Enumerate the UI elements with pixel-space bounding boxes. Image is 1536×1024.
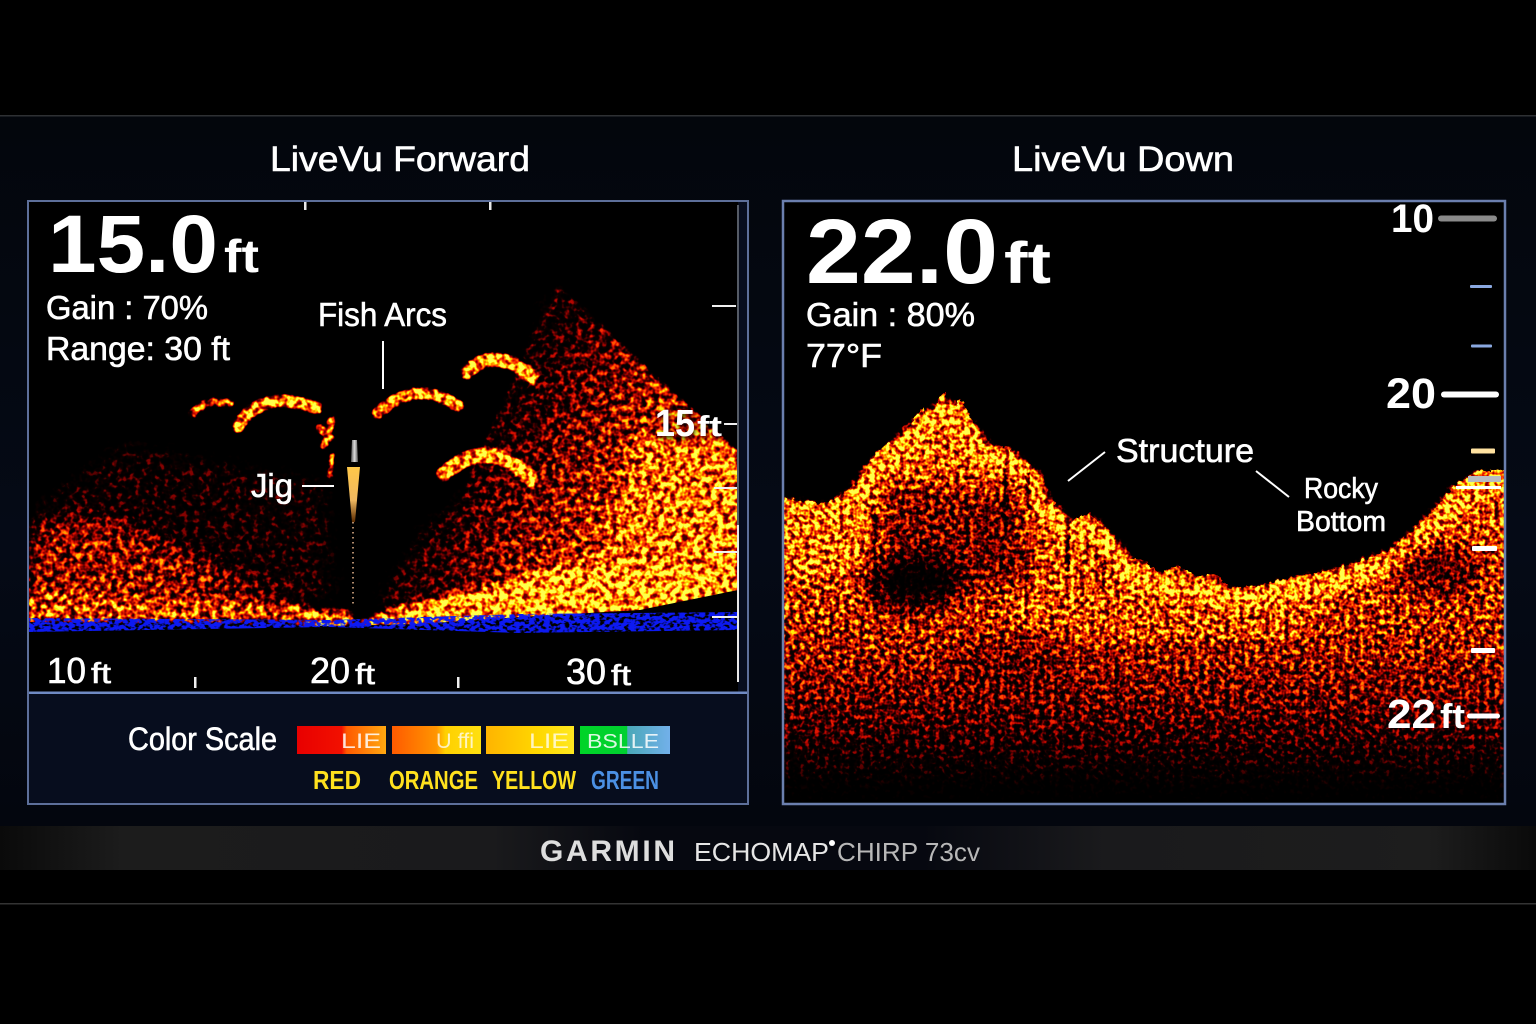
- readout: down depth: 22.0: [806, 201, 998, 303]
- readout: forward depth: 15.0: [48, 199, 218, 290]
- top rule: [0, 115, 1536, 116]
- depth label: 22 ft: ft: [1440, 698, 1465, 736]
- heading: LiveVu Down: LiveVu Down: [1012, 140, 1234, 179]
- depth label: 15 ft: [655, 403, 722, 445]
- range label: 20 ft: 20: [310, 650, 350, 691]
- device band background: [0, 116, 1536, 826]
- panel: LiveVu Down: [775, 197, 1515, 815]
- footer strip: [0, 826, 1536, 870]
- callout: structure: [1068, 432, 1254, 481]
- callout: structure: Structure: [1116, 432, 1254, 469]
- color scale legend: [128, 721, 670, 795]
- jig body: [347, 467, 360, 522]
- readout: gain: Gain : 70%: [46, 289, 208, 326]
- swatch: red: LIE: [341, 730, 381, 753]
- legend label: green: GREEN: [591, 765, 659, 795]
- depth label: 20: 20: [1386, 370, 1436, 418]
- swatch: orange: U ffi: [436, 730, 474, 753]
- panel border: [28, 201, 748, 804]
- dark shadows: [865, 480, 1488, 691]
- readout: down depth: ft: [1004, 231, 1051, 296]
- depth label: 22 ft: 22: [1387, 691, 1436, 737]
- infographic canvas: [0, 115, 1536, 904]
- bottom mass: [775, 393, 1515, 815]
- jig head: [351, 440, 358, 462]
- right depth scale: [712, 205, 739, 682]
- legend title: Color Scale: [128, 721, 277, 757]
- top range ticks: [304, 202, 492, 210]
- panel border: [783, 201, 1505, 804]
- divider above color scale: [28, 692, 748, 694]
- legend label: yellow: YELLOW: [492, 765, 576, 795]
- swatch: orange: [392, 726, 481, 754]
- swatch: green: [580, 726, 670, 754]
- callout: jig: Jig: [251, 467, 293, 504]
- range label: 30 ft: 30: [566, 651, 606, 692]
- product: ECHOMAP: ECHOMAP: [694, 837, 829, 867]
- swatch: yellow: [486, 726, 574, 754]
- heading: LiveVu Forward: LiveVu Forward: [270, 140, 530, 179]
- range label: 20 ft: ft: [355, 659, 375, 691]
- product: CHIRP 73cv: CHIRP 73cv: [837, 837, 980, 867]
- callout: fish arcs: Fish Arcs: [318, 296, 447, 333]
- swatch: red: [297, 726, 386, 754]
- callout: rocky bottom: Bottom: [1296, 506, 1386, 538]
- legend label: orange: ORANGE: [389, 765, 478, 795]
- bottom rule: [0, 903, 1536, 904]
- blue water-floor band: [28, 612, 738, 633]
- depth label: 15 ft: 15: [655, 403, 695, 445]
- sonar viewport: [783, 201, 1505, 804]
- range label: 20 ft: [310, 650, 375, 691]
- depth label: 10: 10: [1391, 197, 1434, 241]
- swatch: yellow: LIE: [529, 730, 569, 753]
- depth label: 15 ft: ft: [697, 411, 722, 443]
- range label: 30 ft: [566, 651, 631, 692]
- bottom range ticks: [194, 677, 460, 688]
- range label: 10 ft: [47, 650, 111, 691]
- range label: 10 ft: 10: [47, 650, 86, 691]
- depth label: 22 ft: [1387, 691, 1465, 737]
- readout: forward depth: ft: [224, 230, 259, 282]
- range label: 10 ft: ft: [91, 658, 111, 690]
- depth scale: [1386, 197, 1501, 737]
- callout: fish arcs: [318, 296, 447, 389]
- brand: GARMIN: GARMIN: [540, 835, 675, 868]
- callout: rocky bottom: Rocky: [1304, 473, 1378, 505]
- sonar viewport: [28, 202, 738, 692]
- sonar echo field: [29, 288, 737, 626]
- dark vertical streaks: [875, 465, 1103, 610]
- footer background: [0, 826, 1536, 870]
- range label: 30 ft: ft: [611, 660, 631, 692]
- callout: rocky bottom: [1256, 471, 1386, 538]
- callout: jig: [251, 467, 334, 504]
- legend label: red: RED: [313, 765, 361, 795]
- shaped brightness: [784, 410, 1504, 640]
- panel: LiveVu Forward: [28, 199, 748, 804]
- jig trail: [352, 522, 354, 606]
- sonar bottom profile: [775, 202, 1515, 815]
- registered dot: [829, 840, 835, 846]
- readout: range: Range: 30 ft: [46, 330, 230, 367]
- swatch: green: BSLLE: [587, 731, 659, 753]
- readout: gain: Gain : 80%: [806, 296, 975, 333]
- readout: temperature: 77°F: [806, 337, 882, 374]
- panel fill: [28, 201, 748, 804]
- icon: jig on screen: [347, 440, 360, 606]
